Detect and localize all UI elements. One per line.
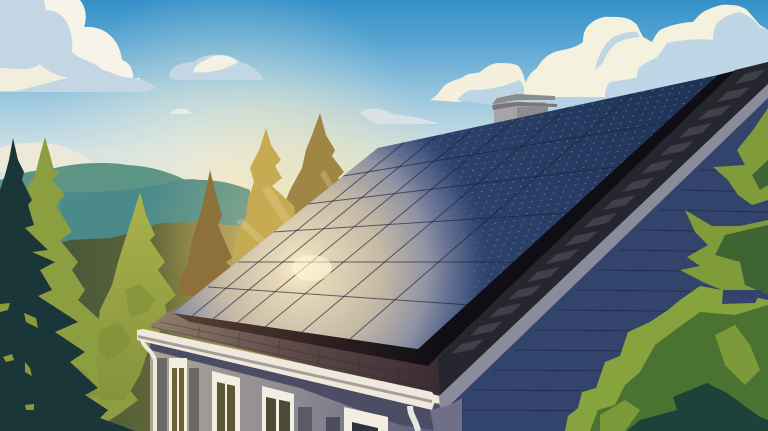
windows — [157, 358, 388, 431]
forest background — [0, 190, 345, 431]
panel cell dots — [173, 75, 718, 349]
downpipe: right — [410, 406, 418, 431]
cloud: large top right — [430, 5, 768, 122]
glare hot spot — [292, 255, 332, 281]
roof shingle lines — [152, 322, 436, 390]
downpipe: left — [142, 340, 155, 431]
upper branch shade — [715, 160, 768, 295]
wall corner — [430, 398, 462, 431]
panel grid lines — [192, 93, 670, 339]
shutter — [189, 368, 199, 431]
window 3 — [262, 386, 294, 431]
cloud: thin wisps — [0, 108, 440, 172]
cloud: top left — [0, 0, 156, 92]
window 2 — [212, 371, 240, 431]
foliage shade — [590, 305, 768, 431]
lower foliage — [565, 286, 768, 431]
roof shingles — [148, 62, 768, 396]
roof shingle tiles right — [451, 69, 766, 354]
tree: brown conifer — [178, 170, 238, 296]
mountains — [0, 163, 250, 300]
wall: right gable siding — [440, 85, 768, 431]
window 1 — [169, 358, 187, 431]
shutter left — [157, 358, 167, 431]
panel shadow band — [173, 71, 735, 366]
trees: background conifers — [0, 113, 346, 431]
sun haze over landscape — [140, 70, 480, 410]
tree: golden conifer — [232, 128, 296, 262]
foliage highlight — [600, 325, 760, 431]
tree: dark conifer — [0, 138, 135, 431]
dark conifer light patches — [0, 303, 38, 410]
window 4 — [344, 407, 388, 431]
shutter — [298, 407, 312, 431]
rake trim — [439, 84, 768, 410]
cloud: small centre — [169, 54, 264, 80]
siding gap — [722, 290, 762, 304]
solar panel array — [173, 75, 718, 349]
chimney — [492, 94, 557, 132]
panel base — [173, 75, 718, 349]
shutter — [326, 417, 340, 431]
upper branches — [680, 108, 768, 290]
tree mottling — [60, 284, 155, 400]
gutter shadow line — [138, 335, 432, 403]
panel sun glare — [173, 75, 718, 349]
tree: olive conifer — [10, 137, 138, 431]
sun rays — [236, 170, 345, 266]
eave shadow band — [150, 342, 440, 431]
tree: brown gold conifer — [286, 113, 346, 226]
gutter — [137, 329, 436, 410]
roof right dark strip — [438, 62, 768, 396]
foliage dark base — [627, 383, 768, 431]
tree: foreground right — [565, 108, 768, 431]
tree: light green conifer — [95, 192, 176, 400]
wall: front siding — [150, 342, 462, 431]
